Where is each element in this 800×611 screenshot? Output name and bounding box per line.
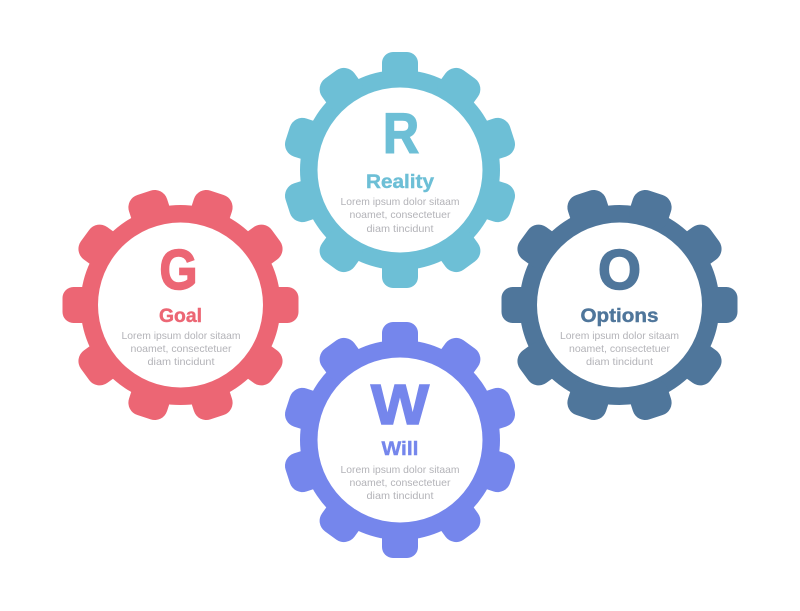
text block: Options description: diam tincidunt (586, 357, 653, 368)
text block: Options description: Lorem ipsum dolor sitaam (560, 331, 679, 342)
text block: Goal description (122, 331, 240, 368)
text block: Reality description: noamet, consectetuer (350, 210, 451, 221)
text block: Reality description: diam tincidunt (366, 224, 434, 235)
heading: Goal: Goal (159, 306, 202, 327)
gear panel: Reality (282, 52, 518, 288)
letter: G: G (160, 238, 198, 302)
text block: Goal description: diam tincidunt (148, 357, 215, 368)
text block: Options description (560, 331, 679, 368)
heading: Reality: Reality (366, 172, 434, 193)
gear panel: Options (502, 187, 738, 423)
heading: Options: Options (580, 306, 658, 327)
icon: Will gear (282, 322, 518, 558)
text block: Goal description: noamet, consectetuer (130, 344, 232, 355)
text block: Options description: noamet, consectetuer (569, 344, 671, 355)
text block: Goal description: Lorem ipsum dolor sitaam (122, 331, 240, 342)
text block: Will description: Lorem ipsum dolor sitaam (340, 465, 460, 476)
text block: Reality description (340, 197, 460, 235)
icon: Options gear (502, 187, 738, 423)
gear panel: Goal (62, 187, 298, 423)
letter: O: O (598, 238, 641, 302)
icon: Reality gear (282, 52, 518, 288)
text block: Reality description: Lorem ipsum dolor sitaam (340, 197, 460, 208)
text block: Will description: noamet, consectetuer (350, 478, 451, 489)
letter: W: W (371, 373, 429, 437)
heading: Will: Will (382, 439, 418, 460)
letter: R: R (383, 102, 419, 166)
text block: Will description (340, 465, 460, 502)
text block: Will description: diam tincidunt (366, 491, 434, 502)
gear panel: Will (282, 322, 518, 558)
icon: Goal gear (62, 187, 298, 423)
